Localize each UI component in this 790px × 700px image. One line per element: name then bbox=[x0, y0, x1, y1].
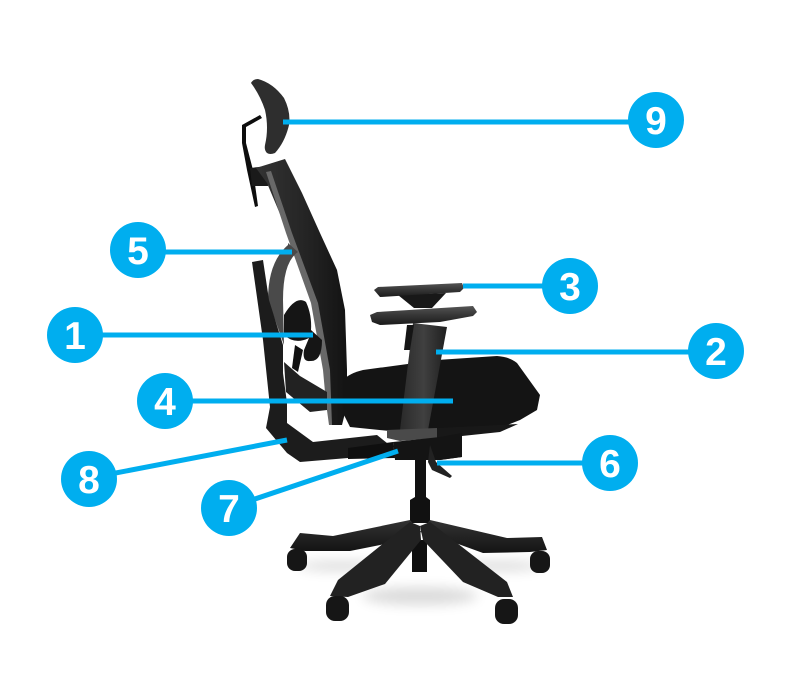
gas cylinder bbox=[410, 460, 430, 523]
callout 4: seat: 4 bbox=[154, 381, 176, 424]
callout 8: rear bracket bbox=[61, 440, 287, 507]
callout 2: arm post bbox=[436, 323, 744, 379]
rear frame and seat bracket bbox=[252, 260, 392, 462]
callout 5: back tilt bbox=[110, 222, 292, 278]
casters bbox=[287, 549, 550, 624]
callout 1: lumbar support: 1 bbox=[64, 315, 86, 358]
callout 9: headrest: 9 bbox=[645, 100, 667, 143]
backrest bbox=[256, 159, 347, 425]
callout 2: arm post: 2 bbox=[705, 331, 727, 374]
callout 1: lumbar support bbox=[47, 307, 313, 363]
five-star base bbox=[290, 520, 547, 597]
lumbar support bbox=[268, 243, 327, 412]
callout 3: armrest height: 3 bbox=[559, 266, 581, 309]
callout 7: tilt mechanism: 7 bbox=[218, 488, 240, 531]
floor shadow bbox=[298, 561, 542, 605]
callout 6: height lever: 6 bbox=[599, 443, 621, 486]
callout 9: headrest bbox=[283, 92, 684, 148]
callout 6: height lever bbox=[437, 435, 638, 491]
headrest bbox=[242, 79, 289, 207]
chair illustration bbox=[242, 79, 550, 624]
callout 5: back tilt: 5 bbox=[127, 230, 149, 273]
callout 4: seat bbox=[137, 373, 453, 429]
callout 3: armrest height bbox=[463, 258, 598, 314]
callout 7: tilt mechanism bbox=[201, 451, 398, 536]
armrests bbox=[370, 283, 477, 430]
seat cushion bbox=[343, 356, 540, 432]
callout 8: rear bracket: 8 bbox=[78, 459, 100, 502]
seat mechanism bbox=[348, 424, 518, 478]
